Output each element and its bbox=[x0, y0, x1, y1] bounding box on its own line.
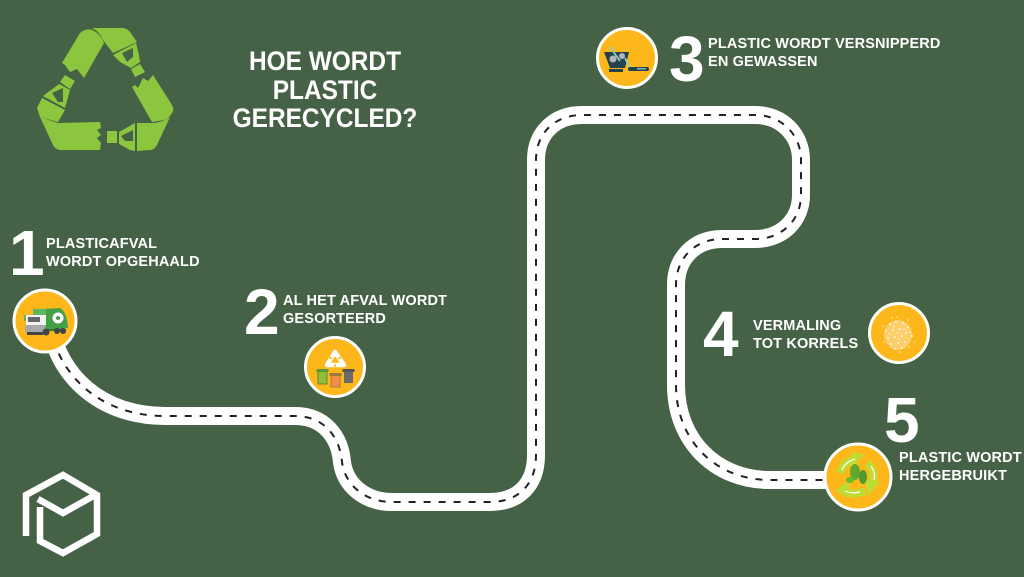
icon: circle 3, shredder machine bbox=[598, 28, 656, 88]
step 2 number: 2 bbox=[244, 276, 280, 348]
step 2 text bbox=[283, 293, 447, 327]
step 3 text: PLASTIC WORDT VERSNIPPERD bbox=[708, 36, 941, 52]
step 1 text: PLASTICAFVAL bbox=[46, 236, 157, 252]
icon: circle 5, green recycling arrows with leaves bbox=[825, 444, 891, 510]
icon: circle 4, plastic granules bbox=[870, 304, 928, 362]
step 2 text: AL HET AFVAL WORDT bbox=[283, 293, 447, 309]
step 4 text: TOT KORRELS bbox=[753, 336, 858, 352]
step 5 number: 5 bbox=[884, 384, 920, 456]
step 5 text bbox=[899, 450, 1022, 484]
icon: circle 2, recycling symbol and bins bbox=[306, 338, 364, 396]
winding road bbox=[50, 115, 850, 502]
step 5 text: PLASTIC WORDT bbox=[899, 450, 1022, 466]
step 4 text: VERMALING bbox=[753, 318, 841, 334]
step 4 number: 4 bbox=[703, 298, 739, 370]
step 4 text bbox=[753, 318, 858, 352]
title: HOE WORDT bbox=[249, 46, 401, 76]
logo: white hexagonal box bbox=[26, 475, 97, 553]
step 3 text: EN GEWASSEN bbox=[708, 54, 818, 70]
step 1 text: WORDT OPGEHAALD bbox=[46, 254, 200, 270]
title: PLASTIC bbox=[273, 74, 377, 104]
step 1 number: 1 bbox=[9, 217, 45, 289]
icon: circle 1, garbage truck bbox=[14, 290, 76, 352]
step 2 text: GESORTEERD bbox=[283, 311, 386, 327]
title: GERECYCLED? bbox=[233, 103, 417, 133]
step 1 text bbox=[46, 236, 200, 270]
icon: recycling arrows made of plastic bottles bbox=[37, 28, 173, 151]
step 5 text: HERGEBRUIKT bbox=[899, 468, 1007, 484]
step 3 number: 3 bbox=[669, 23, 705, 95]
step 3 text bbox=[708, 36, 941, 70]
title bbox=[233, 46, 417, 133]
